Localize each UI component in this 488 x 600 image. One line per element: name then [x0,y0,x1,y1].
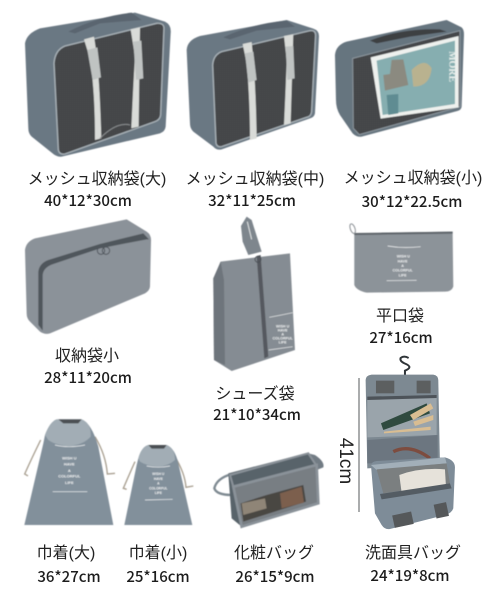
label: shoe bag: シューズ袋 [215,385,295,403]
label: large mesh organizer: メッシュ収納袋(大) [28,170,166,188]
bag: small drawstring: COLORFUL [149,486,168,490]
label: flat zip pouch [369,307,433,348]
label: medium mesh organizer: 32*11*25cm [208,190,296,211]
bag: shoe bag: LIFE [279,340,287,344]
bag: cosmetic pouch [214,453,324,527]
bag: medium mesh organizer [187,20,319,150]
bag: large drawstring [24,419,115,525]
label: large drawstring: 36*27cm [37,566,101,587]
label: medium mesh organizer [186,170,324,211]
label: toiletry bag: 24*19*8cm [370,565,450,586]
label: shoe bag: 21*10*34cm [213,404,301,425]
bag: small drawstring: HAVE [154,477,164,481]
bag: large drawstring: HAVE [64,462,75,467]
label: flat zip pouch: 27*16cm [369,327,433,348]
bag: flat zip pouch: A [401,264,404,268]
bag: flat zip pouch: HAVE [398,259,408,263]
label: medium mesh organizer: メッシュ収納袋(中) [186,170,324,188]
bag: plain storage organizer [25,219,151,334]
bag: small mesh organizer with magazine: MORE [446,51,457,83]
bag: shoe bag: WISH U [276,324,290,328]
label: plain storage organizer: 収納袋小 [55,347,119,365]
bag: small drawstring: WISH U [152,472,165,476]
label: toiletry bag: 洗面具バッグ [365,544,461,562]
label: toiletry bag [365,544,461,586]
label: small mesh organizer [344,169,482,212]
bag: shoe bag: COLORFUL [272,336,294,340]
label: shoe bag [213,385,301,425]
bag: small drawstring: LIFE [155,491,163,495]
bag: large drawstring: LIFE [65,480,74,485]
bag: shoe bag [213,217,295,371]
label: small drawstring: 巾着(小) [129,544,187,562]
bag: large mesh organizer [25,13,171,157]
label: flat zip pouch: 平口袋 [376,307,424,325]
label: cosmetic pouch [234,544,315,587]
bag: large drawstring: COLORFUL [58,474,81,479]
label: large drawstring: 巾着(大) [37,544,95,562]
label: large drawstring [37,544,101,587]
bag: hanging toiletry bag [366,357,455,529]
label: plain storage organizer: 28*11*20cm [44,367,132,388]
dimension: 41cm height line: 41cm [335,438,356,484]
bag: shoe bag: A [281,332,284,336]
bag: large drawstring: A [68,468,71,473]
bag: flat zip pouch: WISH U [397,254,410,258]
label: small drawstring: 25*16cm [126,566,190,587]
bag: small drawstring: A [157,481,160,485]
bag: small mesh organizer with magazine [335,20,464,137]
label: cosmetic pouch: 化粧バッグ [234,544,314,562]
label: small mesh organizer: 30*12*22.5cm [362,191,462,212]
bag: small drawstring [123,445,193,525]
label: cosmetic pouch: 26*15*9cm [235,566,315,587]
bag: flat zip pouch: LIFE [399,273,407,277]
bag: large drawstring: WISH U [62,455,77,460]
label: small drawstring [126,544,190,587]
label: plain storage organizer [44,347,132,388]
label: large mesh organizer: 40*12*30cm [44,190,132,211]
dimension: 41cm height line [335,378,359,512]
bag: flat zip pouch: COLORFUL [392,269,414,273]
bag: flat zip pouch [349,223,453,293]
label: small mesh organizer: メッシュ収納袋(小) [344,169,482,187]
bag: shoe bag: HAVE [278,328,288,332]
label: large mesh organizer [28,170,166,211]
